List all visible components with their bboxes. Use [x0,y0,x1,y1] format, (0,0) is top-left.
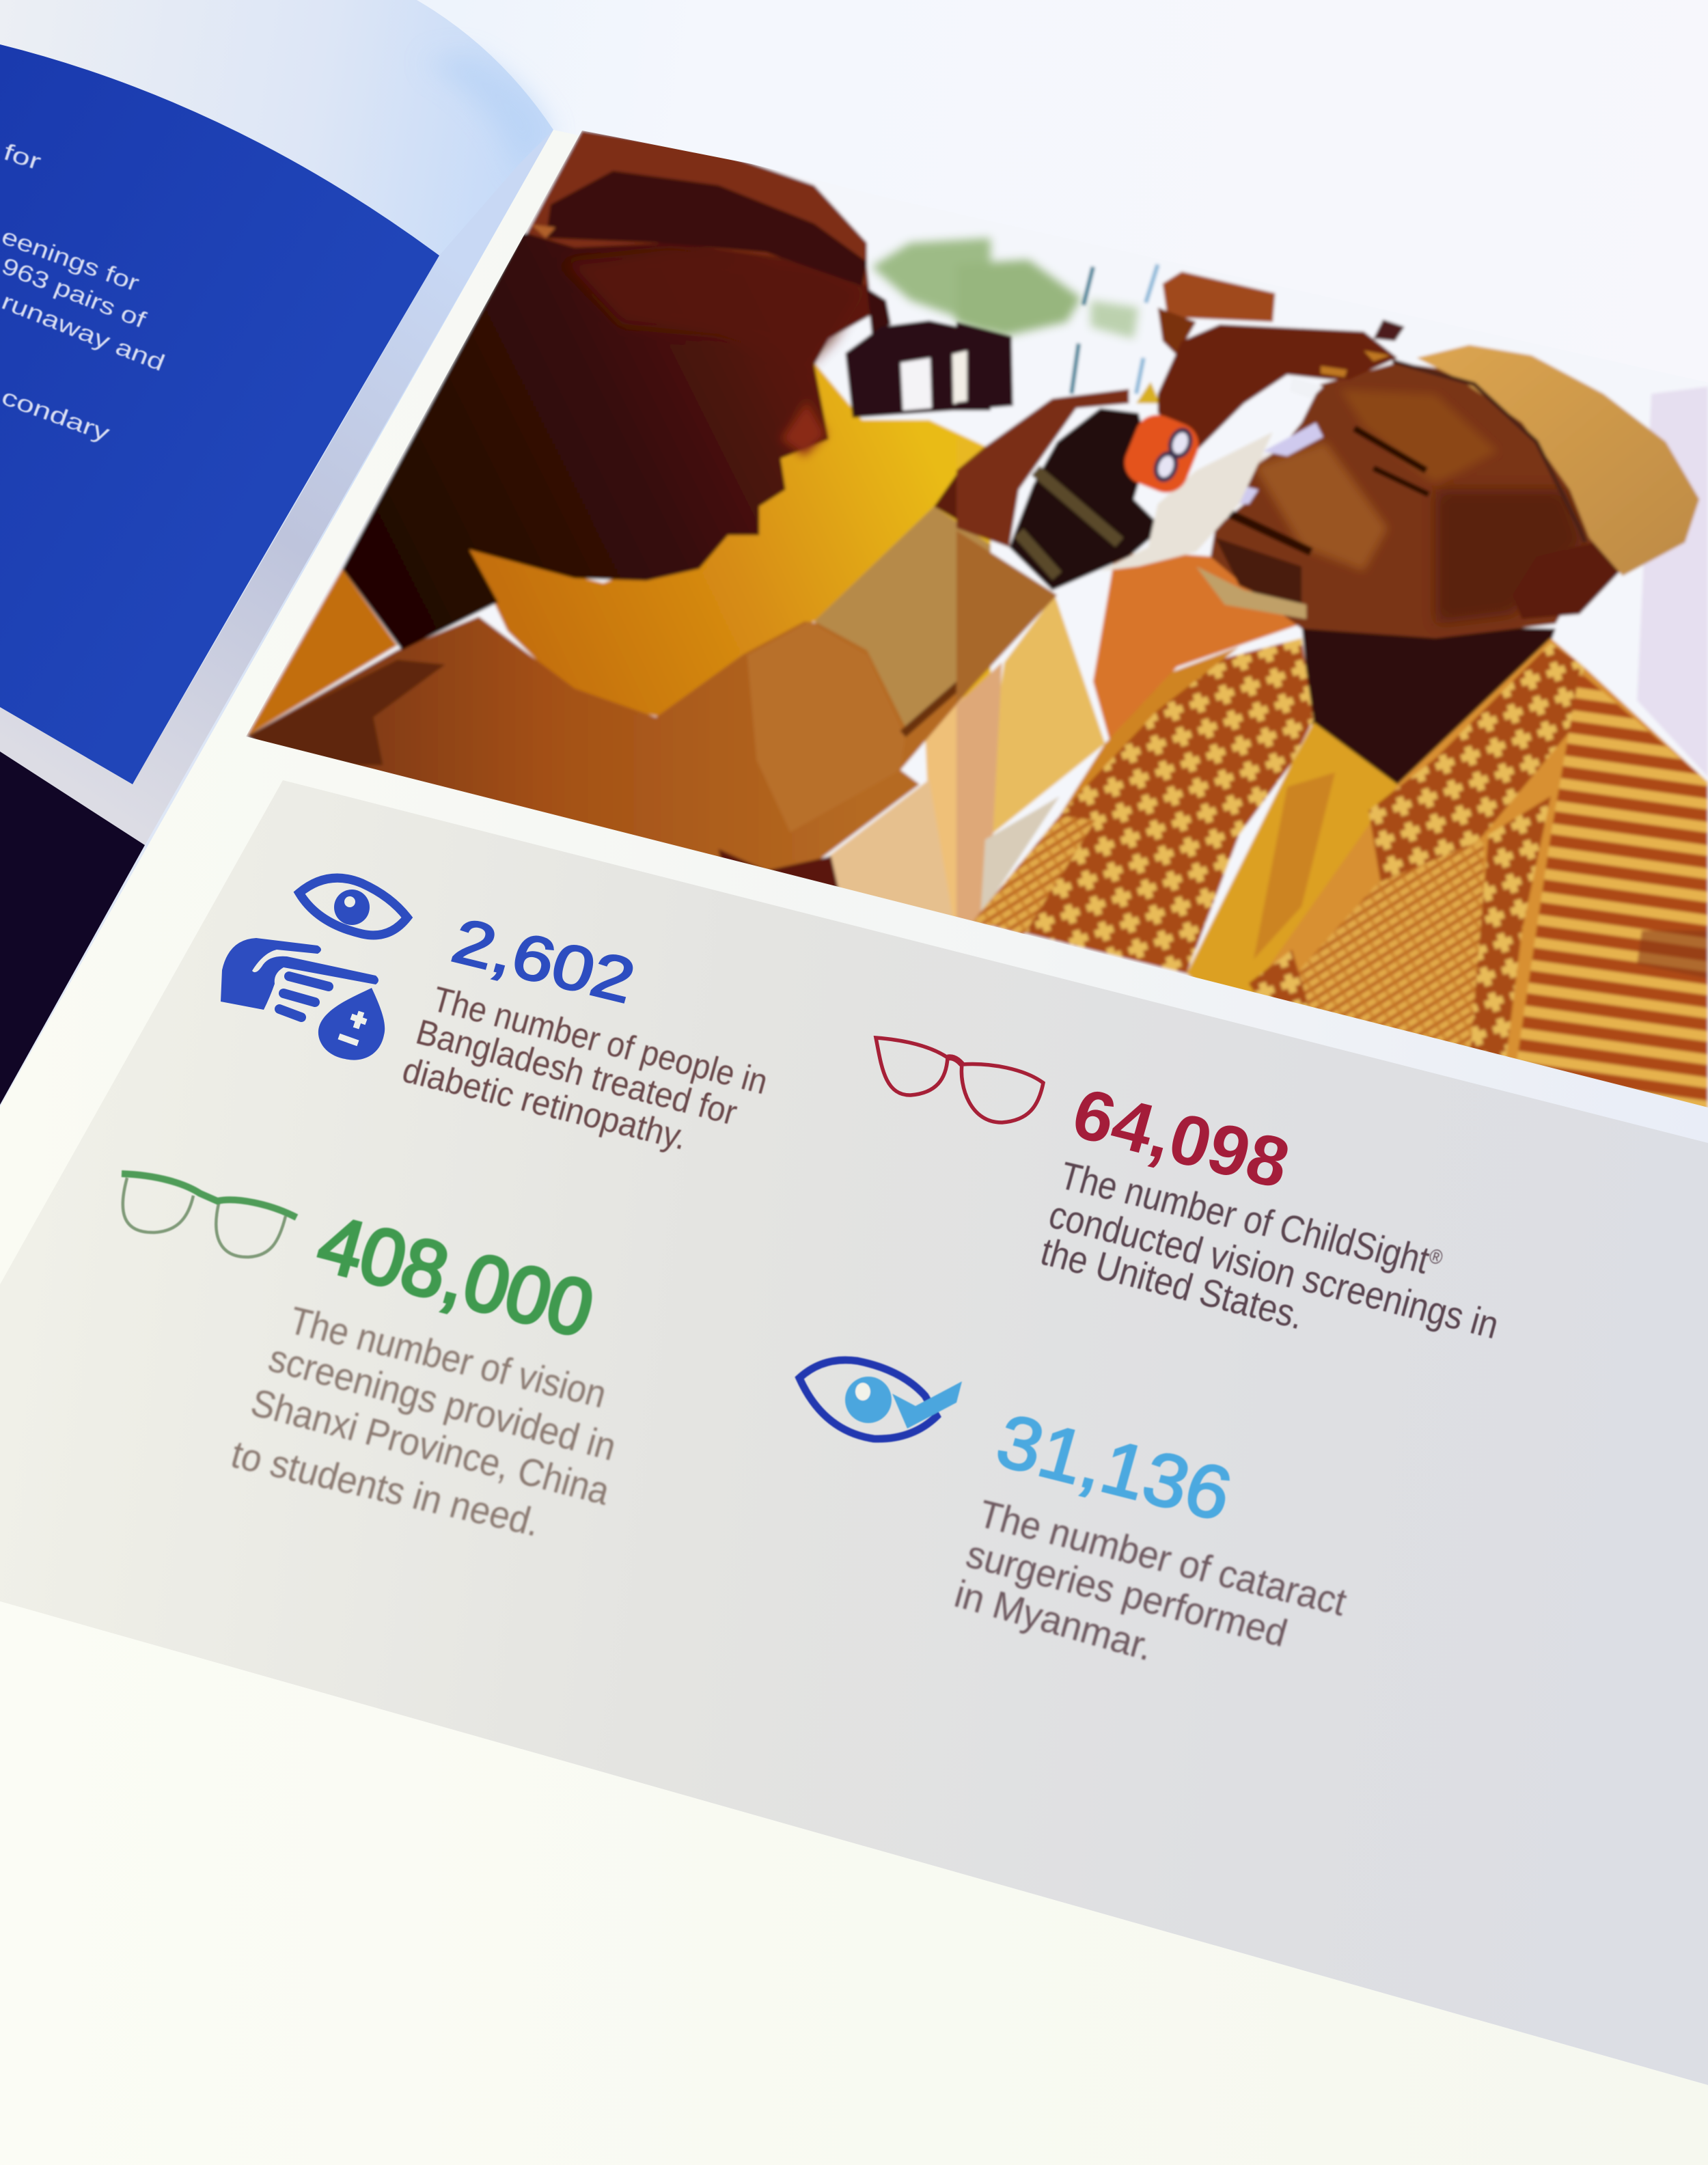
description: 408,000: Shanxi Province, China [246,1381,614,1513]
torch hand [956,389,1129,547]
number: 31,136: 31,136 [989,1399,1240,1536]
description: 2,602: diabetic retinopathy. [398,1051,691,1158]
description: 408,000: screenings provided in [264,1336,621,1470]
left page of the brochure [0,0,553,1107]
scarf right [1254,638,1708,1122]
left page clipped text: for [1,139,44,176]
left page clipped text: eenings for [0,223,143,297]
number: 64,098: 64,098 [1064,1074,1297,1204]
lower blank page area [0,1601,1708,2165]
statistic: 408,000 vision screenings [122,1174,621,1545]
left page clipped text: runaway and [0,288,168,376]
icon: red glasses [876,1038,1043,1122]
icon: eye with check mark [799,1360,962,1439]
cloth [1100,432,1273,571]
number: 2,602: 2,602 [445,906,642,1016]
description: 31,136: The number of cataract [974,1492,1351,1625]
icon: eye, hand and blood drop [221,878,407,1060]
torch head [1122,411,1201,495]
description: 64,098: conducted vision screenings in [1044,1193,1504,1347]
description: 408,000: The number of vision [284,1299,611,1416]
description: 64,098: The number of ChildSight [1055,1154,1496,1297]
description: 2,602: Bangladesh treated for [412,1012,741,1133]
description: 64,098: ® [1427,1245,1445,1269]
photo: patient, traced [956,260,1708,1122]
panel: blue text block [0,44,439,784]
examiner raised hand [1158,325,1397,452]
patient neck [1301,624,1556,784]
statistic: 2,602 diabetic retinopathy [221,878,772,1158]
patient robe [1187,722,1397,1026]
number: 408,000: 408,000 [309,1198,603,1354]
scarf left [1023,637,1317,976]
description: 2,602 [398,980,772,1158]
panel: grey statistics background [0,780,1708,2085]
description: 64,098 [1036,1154,1504,1347]
left page clipped text: 963 pairs of [0,253,150,333]
patient face [1211,363,1599,638]
statistic: 31,136 cataract surgeries [799,1360,1351,1670]
patient cap [1416,345,1699,576]
photo: examiner, traced [247,130,991,948]
statistic: 64,098 ChildSight screenings [876,1038,1504,1347]
description: 408,000 [226,1299,621,1545]
photo: eye examination [232,123,1708,1122]
left page clipped text: condary [0,384,113,447]
description: 31,136: in Myanmar. [950,1572,1157,1670]
left page clipped text [0,139,168,447]
description: 31,136: surgeries performed [961,1532,1292,1655]
description: 2,602: The number of people in [428,980,772,1102]
icon: green glasses [122,1174,297,1257]
description: 64,098: the United States. [1036,1230,1309,1338]
background man robe [1093,552,1301,741]
panel: dark photo on left page [0,751,145,1105]
description: 408,000: to students in need. [226,1433,545,1545]
